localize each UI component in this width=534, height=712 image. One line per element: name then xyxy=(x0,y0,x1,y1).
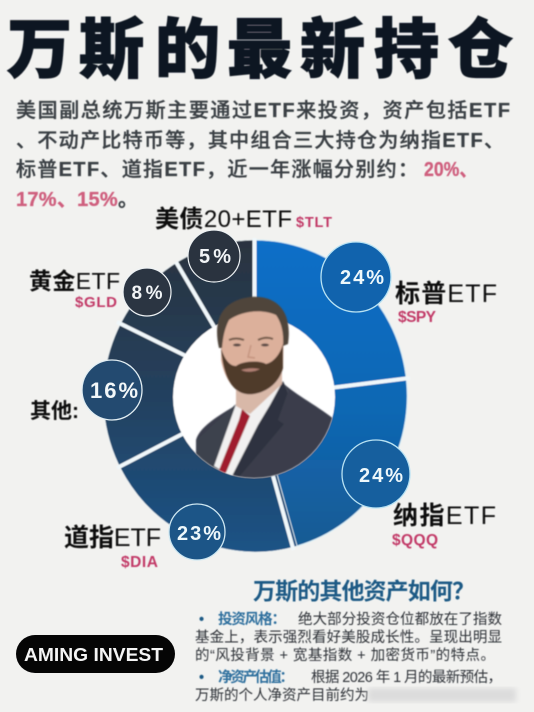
face xyxy=(221,307,284,394)
text block: net worth: 净资产估值： xyxy=(218,669,294,686)
hair xyxy=(217,297,289,348)
intro text xyxy=(16,99,510,211)
badge: DIA 23%: 23% xyxy=(177,523,221,545)
white centre xyxy=(173,316,335,478)
badge: SPY 24%: 24% xyxy=(340,267,384,289)
label: GLD: 黄金ETF xyxy=(29,268,120,294)
label: QQQ xyxy=(392,502,496,549)
title: 斯 xyxy=(79,13,144,86)
label: SPY: $SPY xyxy=(398,309,437,326)
text block: investment style: 的“风投背景 + 宽基指数 + 加密货币”的特点。 xyxy=(195,647,495,664)
text block: investment style: 绝大部分投资仓位都放在了指数 xyxy=(298,611,502,628)
intro text: 20%、 xyxy=(424,159,477,181)
text block: net worth xyxy=(195,669,502,704)
text block: investment style: • xyxy=(199,612,204,628)
label: TLT: 美债20+ETF xyxy=(155,206,292,233)
portrait photo xyxy=(194,296,333,479)
text block: net worth: 根据 2026 年 1 月的最新预估， xyxy=(311,669,502,686)
text block: investment style: 基金上，表示强烈看好美股成长性。呈现出明显 xyxy=(195,629,502,646)
title: 万 xyxy=(7,13,72,86)
intro text: 17%、15%。 xyxy=(16,189,138,211)
text block: investment style xyxy=(195,610,502,664)
label: TLT: $TLT xyxy=(296,215,332,231)
label: other: 其他: xyxy=(30,400,79,423)
label: QQQ: 纳指ETF xyxy=(393,502,496,530)
badge: TLT 5% xyxy=(188,230,240,282)
donut chart xyxy=(103,238,410,552)
segment separators xyxy=(117,238,410,550)
label: SPY: 标普ETF xyxy=(395,280,497,308)
segments: SPY and QQQ xyxy=(255,240,407,546)
label: QQQ: $QQQ xyxy=(392,532,438,549)
title: 新 xyxy=(300,13,365,86)
text block: net worth: • xyxy=(199,670,204,686)
label: DIA: $DIA xyxy=(121,554,158,571)
badge: QQQ 24%: 24% xyxy=(359,465,403,487)
intro text: 美国副总统万斯主要通过ETF来投资，资产包括ETF xyxy=(16,99,510,122)
title xyxy=(7,13,513,86)
brand pill xyxy=(16,635,175,673)
badge: other 16% xyxy=(82,360,142,420)
badge: other 16%: 16% xyxy=(90,378,138,403)
brand pill: AMING INVEST xyxy=(24,645,163,665)
badge: TLT 5%: 5% xyxy=(199,246,231,268)
neck xyxy=(236,372,282,414)
badge: SPY 24% xyxy=(321,242,391,312)
intro text: 、不动产比特币等，其中组合三大持仓为纳指ETF、 xyxy=(16,129,504,152)
badge: DIA 23% xyxy=(169,504,225,560)
badge: GLD 8%: 8% xyxy=(132,283,163,304)
title: 的 xyxy=(155,13,220,86)
title: 最 xyxy=(227,13,292,86)
label: GLD xyxy=(29,268,120,311)
label: DIA xyxy=(64,524,161,571)
label: GLD: $GLD xyxy=(75,294,117,311)
label: DIA: 道指ETF xyxy=(64,524,161,552)
badge: QQQ 24% xyxy=(342,440,410,508)
mouth xyxy=(241,368,260,372)
intro text: 标普ETF、道指ETF，近一年涨幅分别约： xyxy=(16,158,418,181)
section heading: 万斯的其他资产如何？ xyxy=(253,578,475,604)
title: 持 xyxy=(374,13,439,86)
eyes and brows xyxy=(229,338,273,340)
text block: investment style: 投资风格： xyxy=(218,610,286,628)
badge: GLD 8% xyxy=(123,268,171,316)
nose xyxy=(248,345,255,358)
segments: DIA, other, gold, TLT xyxy=(103,240,297,552)
title: 仓 xyxy=(448,13,513,86)
suit and shirt xyxy=(194,380,333,479)
label: SPY xyxy=(395,280,497,326)
text block: net worth: 万斯的个人净资产目前约为 xyxy=(195,687,369,704)
beard xyxy=(221,344,283,394)
blurred-out text xyxy=(368,688,516,702)
